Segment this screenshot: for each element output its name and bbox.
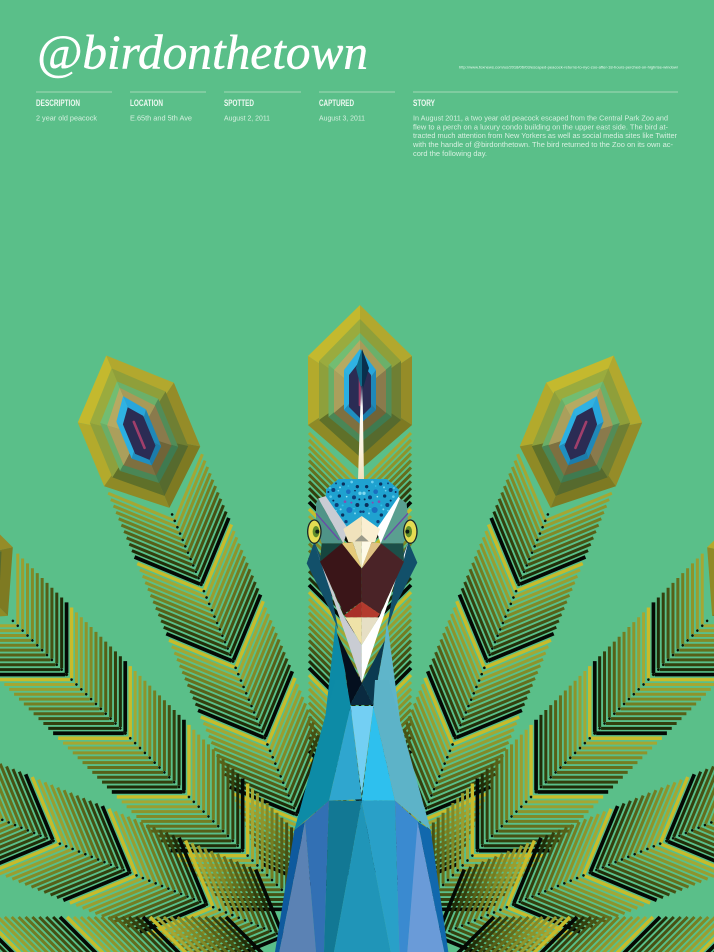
brow stripes bbox=[318, 495, 400, 543]
info: spotted: August 2, 2011 bbox=[224, 116, 270, 122]
info: story: STORY bbox=[413, 98, 435, 108]
lower beak bbox=[345, 617, 379, 645]
info: spotted: SPOTTED bbox=[224, 98, 254, 108]
face bands bbox=[314, 542, 408, 683]
crest stalk bbox=[356, 349, 369, 480]
info: story: tracted much attention from New Yorkers as well as social media sites like Twitter bbox=[413, 133, 678, 140]
peacock head and neck bbox=[307, 479, 418, 720]
source url: http://www.foxnews.com/us/2018/06/03/escaped-peacock-returns-to-nyc-zoo-after-18-hours-perched-on-highrise-window/ bbox=[459, 64, 679, 70]
feathers: bottom pair bbox=[0, 916, 714, 952]
peacock body bbox=[275, 680, 448, 952]
crest bbox=[326, 479, 399, 529]
info: description bbox=[36, 98, 98, 122]
info: location bbox=[130, 98, 192, 122]
upper breast bbox=[294, 680, 431, 830]
info: captured bbox=[319, 98, 365, 122]
lower breast bbox=[275, 801, 448, 952]
info: captured: CAPTURED bbox=[319, 98, 354, 108]
info: location: LOCATION bbox=[130, 98, 163, 108]
feathers: low pair bbox=[0, 666, 714, 952]
info: description: 2 year old peacock bbox=[36, 116, 98, 122]
tongue bbox=[344, 602, 380, 617]
info: description: DESCRIPTION bbox=[36, 98, 80, 108]
icon: left eye bbox=[307, 519, 322, 544]
feathers: upper pair bbox=[58, 336, 662, 913]
feather: centre bbox=[308, 305, 412, 887]
info: story bbox=[412, 98, 678, 158]
title: @birdonthetown bbox=[37, 24, 368, 80]
info: captured: August 3, 2011 bbox=[319, 116, 365, 122]
forehead bbox=[343, 516, 380, 542]
icon: right eye bbox=[403, 519, 418, 544]
cheeks bbox=[316, 498, 408, 562]
info: story: flew to a perch on a luxury condo building on the upper east side. The bird at- bbox=[413, 124, 669, 131]
upper beak bbox=[342, 542, 381, 568]
info: location: E.65th and 5th Ave bbox=[130, 116, 192, 122]
mouth bbox=[320, 543, 404, 614]
neck bbox=[307, 542, 417, 720]
info: story: with the handle of @birdonthetown. The bird returned to the Zoo on its own ac- bbox=[412, 142, 674, 149]
feathers: middle pair bbox=[0, 462, 714, 947]
info: spotted bbox=[224, 98, 270, 122]
info: story: In August 2011, a two year old peacock escaped from the Central Park Zoo and bbox=[413, 116, 668, 122]
info: story: cord the following day. bbox=[413, 151, 487, 158]
